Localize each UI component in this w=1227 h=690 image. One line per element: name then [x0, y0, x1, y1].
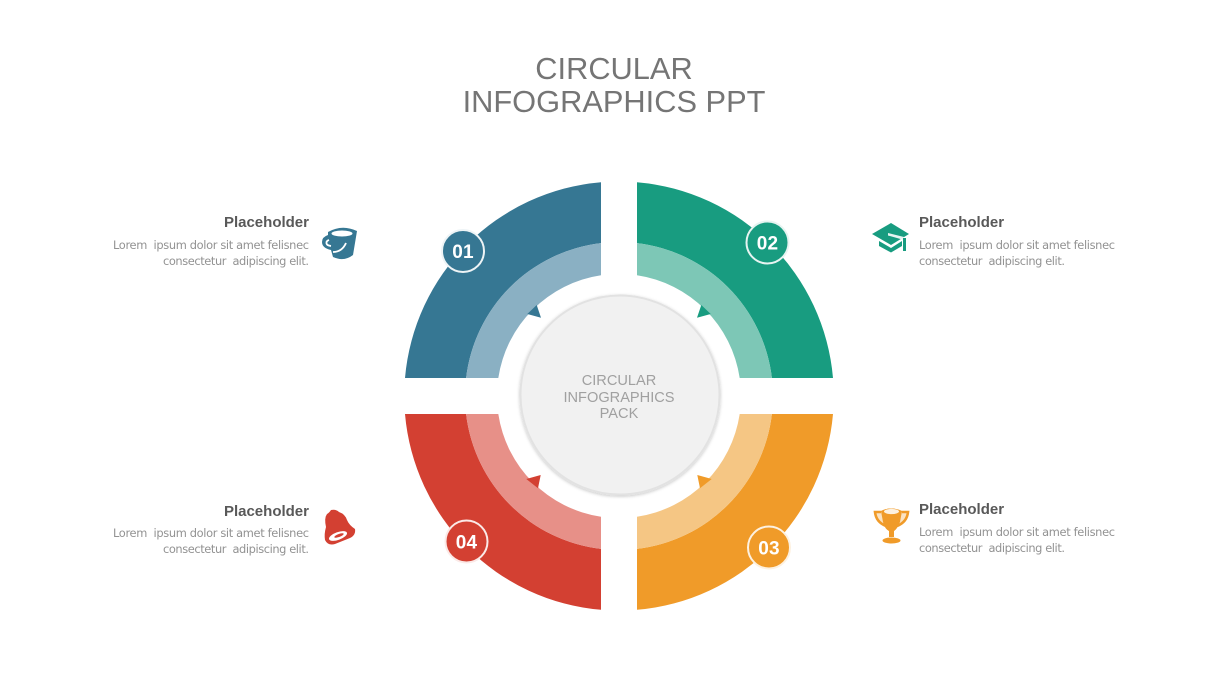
text block: bottom left: consectetur adipiscing elit. — [163, 542, 309, 556]
panel: segment 04 — [405, 414, 601, 610]
title — [463, 51, 766, 119]
icon: graduation cap — [872, 223, 909, 252]
text block: top left — [113, 214, 309, 268]
panel: segment 02: 02 — [757, 234, 778, 254]
title: INFOGRAPHICS PPT — [463, 84, 766, 119]
icon: mug — [322, 228, 357, 259]
text block: bottom left — [113, 503, 309, 556]
panel: segment 02 — [637, 182, 833, 378]
panel: segment 04: 04 — [456, 532, 477, 554]
panel: segment 01: 01 — [452, 242, 474, 263]
center circle: CIRCULAR — [582, 373, 656, 389]
text block: bottom right: Lorem ipsum dolor sit amet felisnec — [919, 525, 1115, 539]
center circle: PACK — [600, 406, 639, 422]
text block: top right: consectetur adipiscing elit. — [919, 254, 1065, 268]
text block: bottom left: Lorem ipsum dolor sit amet felisnec — [113, 526, 309, 540]
icon: bell — [325, 510, 355, 544]
title: CIRCULAR — [535, 51, 693, 86]
text block: top left: Placeholder — [224, 214, 309, 231]
center circle — [520, 296, 720, 494]
panel: segment 03 — [637, 414, 833, 610]
text block: top left: consectetur adipiscing elit. — [163, 254, 309, 268]
text block: bottom right: consectetur adipiscing elit. — [919, 541, 1065, 555]
text block: bottom left: Placeholder — [224, 503, 309, 520]
panel: segment 03: 03 — [758, 538, 780, 560]
text block: bottom right — [919, 501, 1115, 555]
text block: top right: Lorem ipsum dolor sit amet felisnec — [919, 238, 1115, 252]
center circle: INFOGRAPHICS — [563, 390, 675, 406]
text block: top right: Placeholder — [919, 214, 1004, 231]
text block: top right — [919, 214, 1115, 268]
text block: bottom right: Placeholder — [919, 501, 1004, 518]
text block: top left: Lorem ipsum dolor sit amet felisnec — [113, 238, 309, 252]
panel: segment 01 — [405, 182, 601, 378]
icon: trophy — [875, 508, 908, 544]
